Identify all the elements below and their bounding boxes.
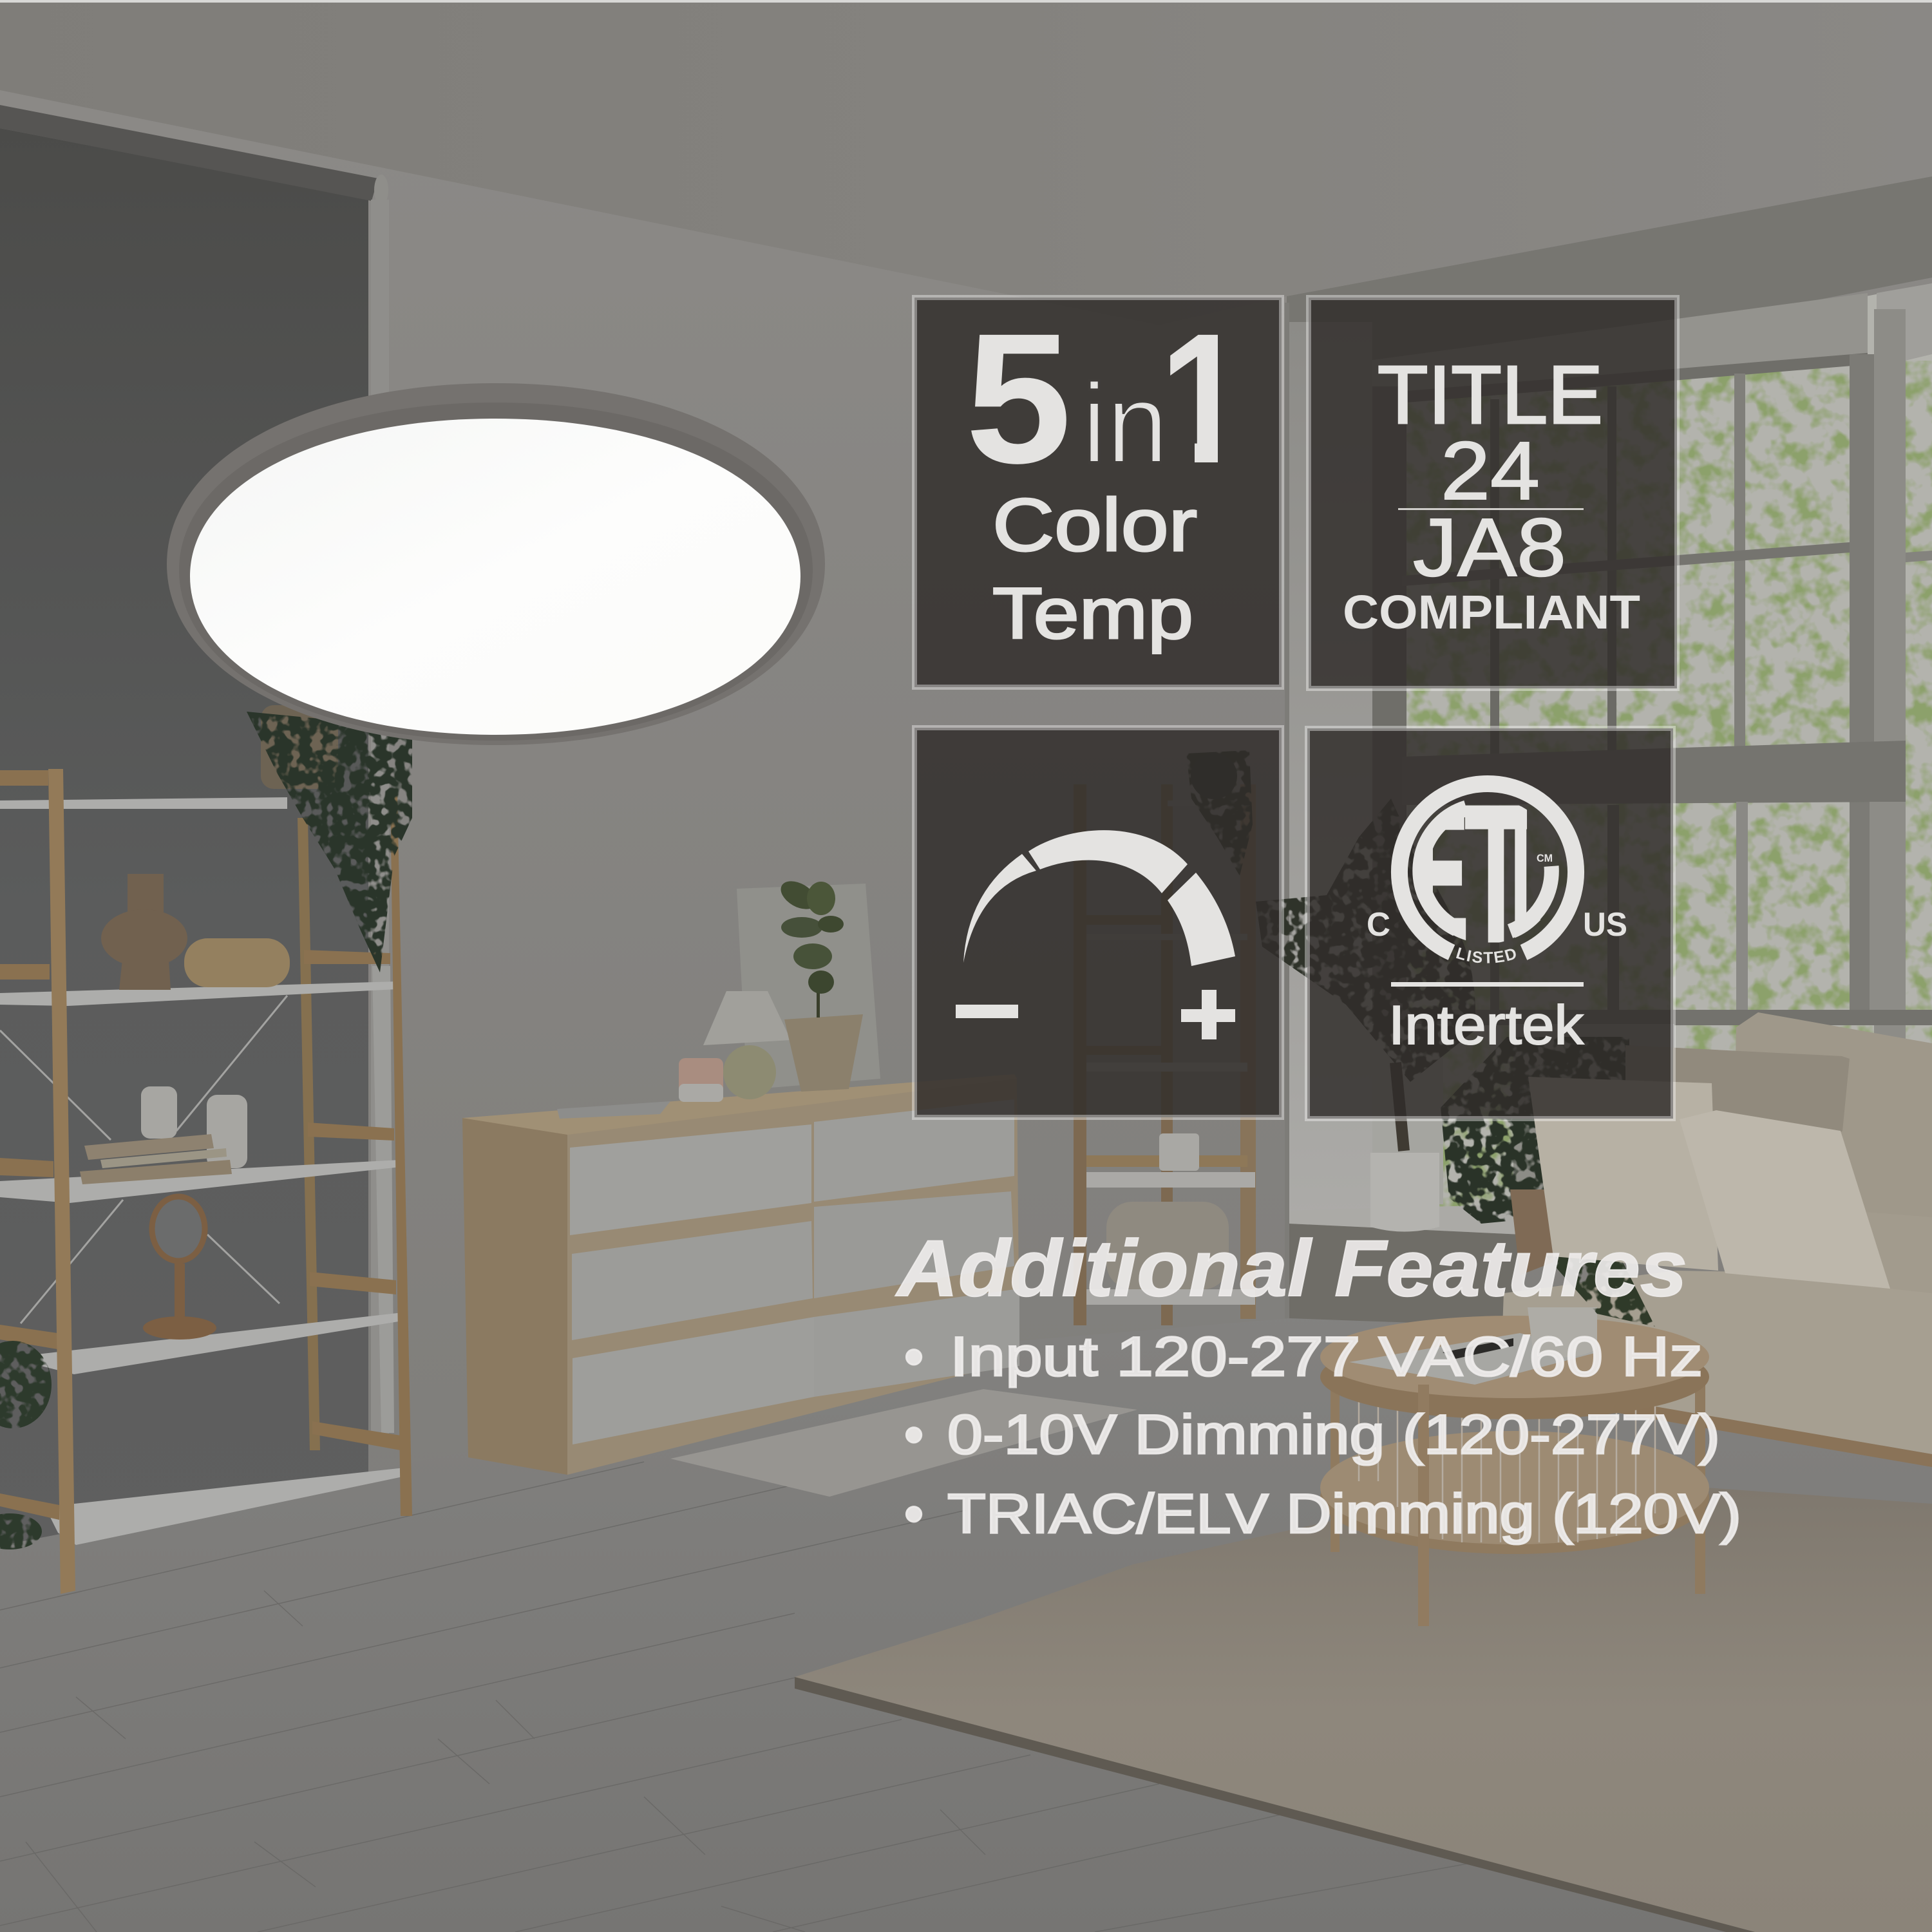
olive tree in pot: [1256, 799, 1475, 1231]
panel: dimming: [914, 728, 1282, 1117]
window frames: [1372, 386, 1406, 1224]
label Intertek: Intertek: [1388, 995, 1584, 1056]
small door mat: [670, 1389, 1137, 1497]
back ladder shelf: [1074, 750, 1256, 1325]
window glass and foliage: [1368, 283, 1932, 1224]
shelf rungs and front posts: [0, 769, 412, 1594]
feature: TRIAC dimming: •: [904, 1483, 923, 1545]
potted palm at edge: [0, 1341, 52, 1549]
woven bowl: [184, 938, 290, 987]
icon: ETL listed mark: CM: [1537, 852, 1553, 864]
shelf wires: [0, 996, 287, 1323]
floor: [0, 1288, 1932, 1932]
logo letters: E: [1416, 764, 1468, 983]
rear posts: [298, 818, 320, 1450]
word in: in: [1082, 361, 1168, 487]
icon: ETL listed mark: L: [1510, 764, 1558, 983]
ficus plant: [1441, 1037, 1629, 1224]
panel: 5 in 1 color temp: [914, 295, 1282, 687]
white shelves: [0, 797, 406, 1545]
heading TITLE: TITLE: [1378, 349, 1603, 441]
sofa: [1501, 1012, 1932, 1467]
left wall corner column: [1289, 322, 1372, 1224]
front bookshelf: [0, 705, 412, 1594]
label US: US: [1583, 906, 1627, 943]
label JA8: JA8: [1413, 502, 1566, 594]
white vases: [141, 1086, 247, 1168]
blind on left wall: [0, 128, 368, 1546]
additional features block: [895, 1224, 1741, 1545]
table mirror: [143, 1197, 216, 1340]
icon: minus: [956, 1005, 1018, 1018]
panel: Title 24 JA8 compliant: [1309, 298, 1677, 688]
feature: input: Input 120-277 VAC/60 Hz: [950, 1326, 1703, 1388]
feature: TRIAC dimming: TRIAC/ELV Dimming (120V): [947, 1483, 1741, 1545]
label Temp: Temp: [992, 573, 1193, 654]
big number 1: 1: [1159, 295, 1249, 502]
roller blinds: [1368, 293, 1868, 399]
label C: C: [1367, 906, 1390, 943]
platform under window: [1289, 1224, 1522, 1327]
hanging plant: [247, 712, 412, 972]
panel: ETL listed Intertek: [1305, 726, 1676, 1121]
feature: 0-10V dimming: •: [904, 1404, 923, 1466]
dresser decor: frame, lamp, candle, potted plant: [679, 875, 880, 1102]
dresser: [462, 1074, 1019, 1475]
vase on shelf: [101, 874, 187, 990]
hanging basket: [261, 705, 338, 789]
area rug: [795, 1488, 1932, 1932]
icon: ETL listed mark: LISTED: [1456, 947, 1516, 963]
header beam above windows: [1287, 176, 1932, 412]
round side table: [1320, 1256, 1709, 1626]
feature: input: •: [904, 1326, 923, 1388]
big number 5: 5: [965, 295, 1072, 502]
ceiling: [0, 0, 1932, 325]
label COMPLIANT: COMPLIANT: [1343, 585, 1640, 639]
icon: ETL listed mark: [1391, 775, 1584, 963]
feature: 0-10V dimming: 0-10V Dimming (120-277V): [947, 1404, 1720, 1466]
icon: dimmer gauge: [963, 830, 1235, 966]
label Color: Color: [992, 483, 1197, 567]
logo letters: T: [1464, 764, 1528, 983]
icon: plus: [1181, 990, 1235, 1039]
logo letters: [1428, 805, 1540, 943]
ceiling light fixture: [167, 383, 825, 745]
heading: Additional Features: [895, 1224, 1687, 1313]
stacked books: [80, 1134, 232, 1184]
number 24: 24: [1441, 425, 1540, 517]
